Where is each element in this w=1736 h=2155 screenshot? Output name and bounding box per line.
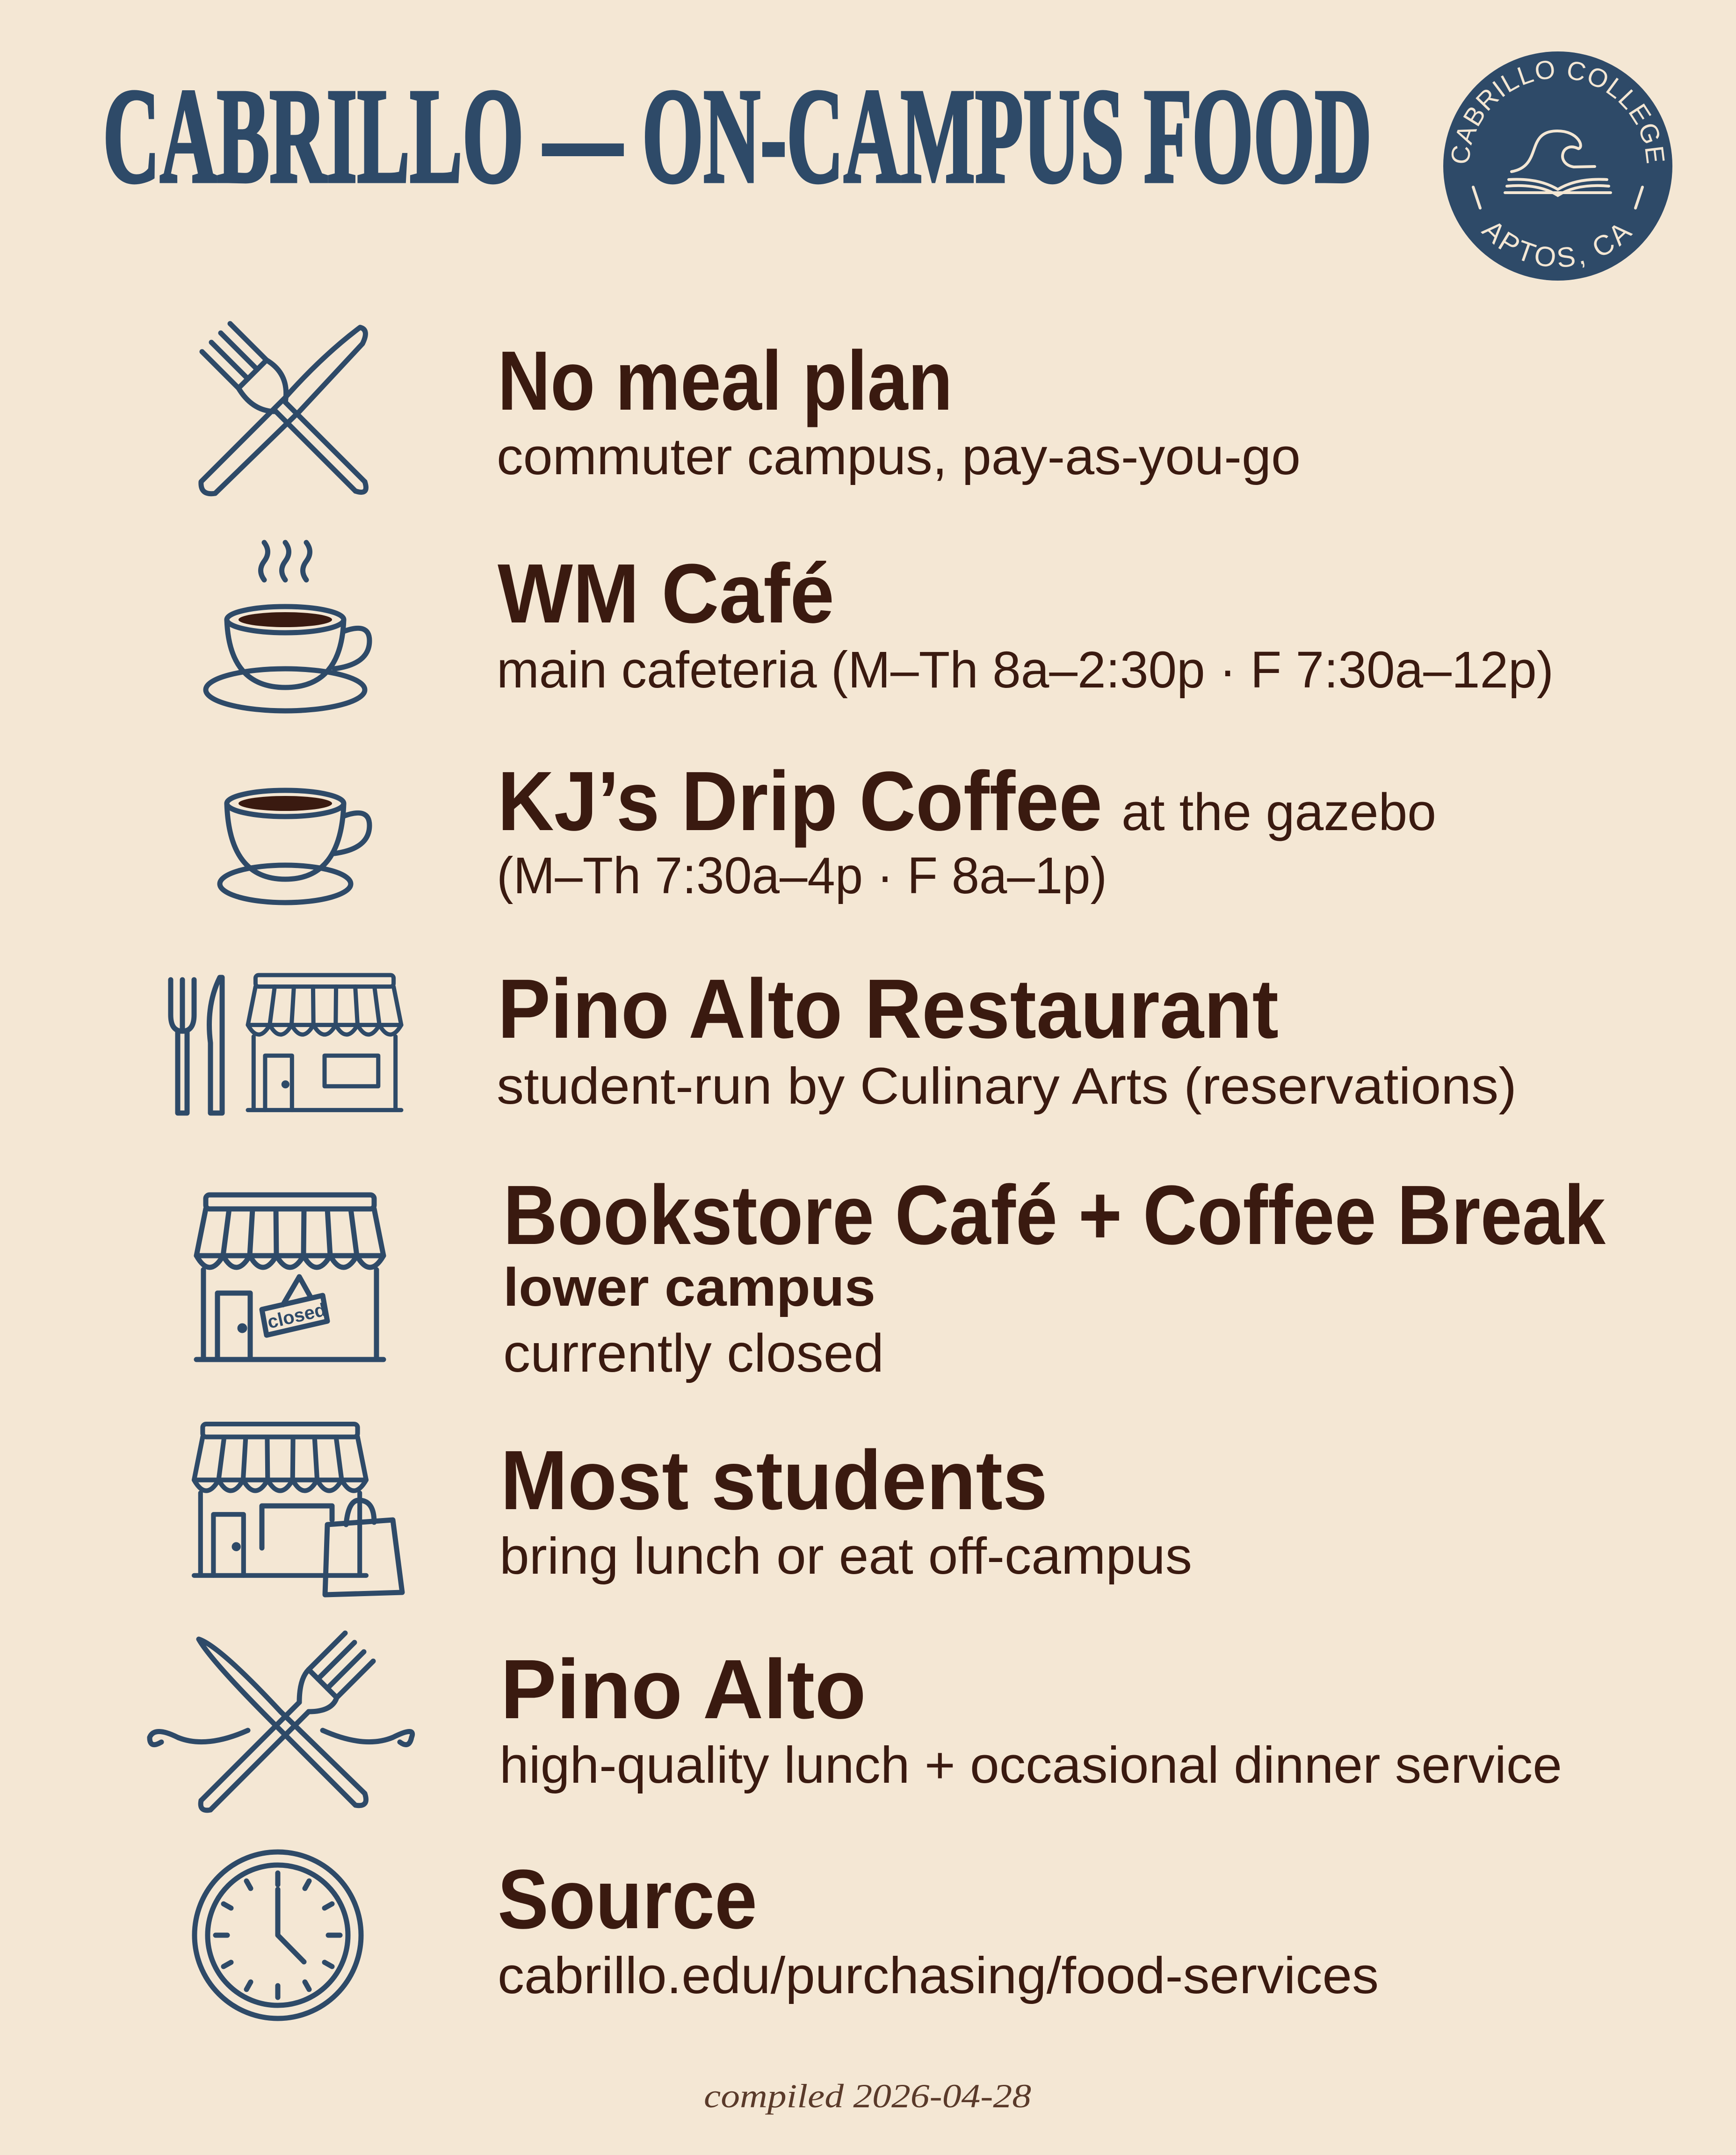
logo badge	[1443, 51, 1672, 281]
item: WM Cafe: main cafeteria (M–Th 8a–2:30p · F 7:30a–12p)	[497, 641, 1554, 699]
item: source: Source	[498, 1852, 757, 1946]
item: no meal plan	[497, 334, 1301, 485]
item: KJ's Drip Coffee	[497, 754, 1436, 904]
item: Bookstore Cafe: Bookstore Café + Coffee Break	[503, 1168, 1606, 1262]
item: Pino Alto	[499, 1642, 1562, 1794]
item: no meal plan: commuter campus, pay-as-you-go	[497, 428, 1301, 485]
footer: compiled 2026-04-28	[704, 2077, 1031, 2115]
item: Pino Alto Restaurant	[497, 962, 1517, 1115]
icon: crossed knife and fork with flourishes	[150, 1633, 412, 1810]
item: Pino Alto Restaurant: Pino Alto Restaurant	[498, 962, 1279, 1056]
item: most students	[499, 1433, 1192, 1585]
item: KJ's Drip Coffee: (M–Th 7:30a–4p · F 8a–1p)	[497, 847, 1107, 904]
icon: coffee cup	[220, 790, 369, 903]
logo badge: CABRILLO COLLEGE	[1445, 54, 1671, 166]
icon: cutlery and restaurant	[171, 975, 401, 1113]
icon: steaming coffee cup	[206, 542, 369, 711]
item: Pino Alto Restaurant: student-run by Culinary Arts (reservations)	[497, 1057, 1517, 1115]
item: KJ's Drip Coffee: at the gazebo	[1121, 783, 1436, 841]
icon: closed shop: closed	[266, 1299, 328, 1333]
item: Bookstore Cafe: currently closed	[503, 1323, 884, 1383]
item: most students: Most students	[500, 1433, 1048, 1527]
icon: closed shop	[196, 1195, 383, 1360]
logo badge: APTOS, CA	[1476, 214, 1639, 274]
item: KJ's Drip Coffee: KJ’s Drip Coffee	[498, 754, 1102, 848]
item: Pino Alto: Pino Alto	[500, 1642, 866, 1736]
icon: crossed fork and knife	[201, 324, 366, 494]
item: WM Cafe: WM Café	[498, 547, 834, 641]
item: no meal plan: No meal plan	[498, 334, 953, 428]
item: WM Cafe	[497, 547, 1554, 699]
item: Bookstore Cafe: lower campus	[503, 1258, 875, 1317]
item: source: cabrillo.edu/purchasing/food-services	[498, 1947, 1379, 2004]
icon: shop and bag	[194, 1424, 402, 1595]
icon: clock	[195, 1852, 361, 2018]
item: Pino Alto: high-quality lunch + occasional dinner service	[499, 1736, 1562, 1794]
item: most students: bring lunch or eat off-campus	[499, 1527, 1192, 1585]
item: Bookstore Cafe	[503, 1168, 1606, 1383]
item: source	[498, 1852, 1379, 2004]
